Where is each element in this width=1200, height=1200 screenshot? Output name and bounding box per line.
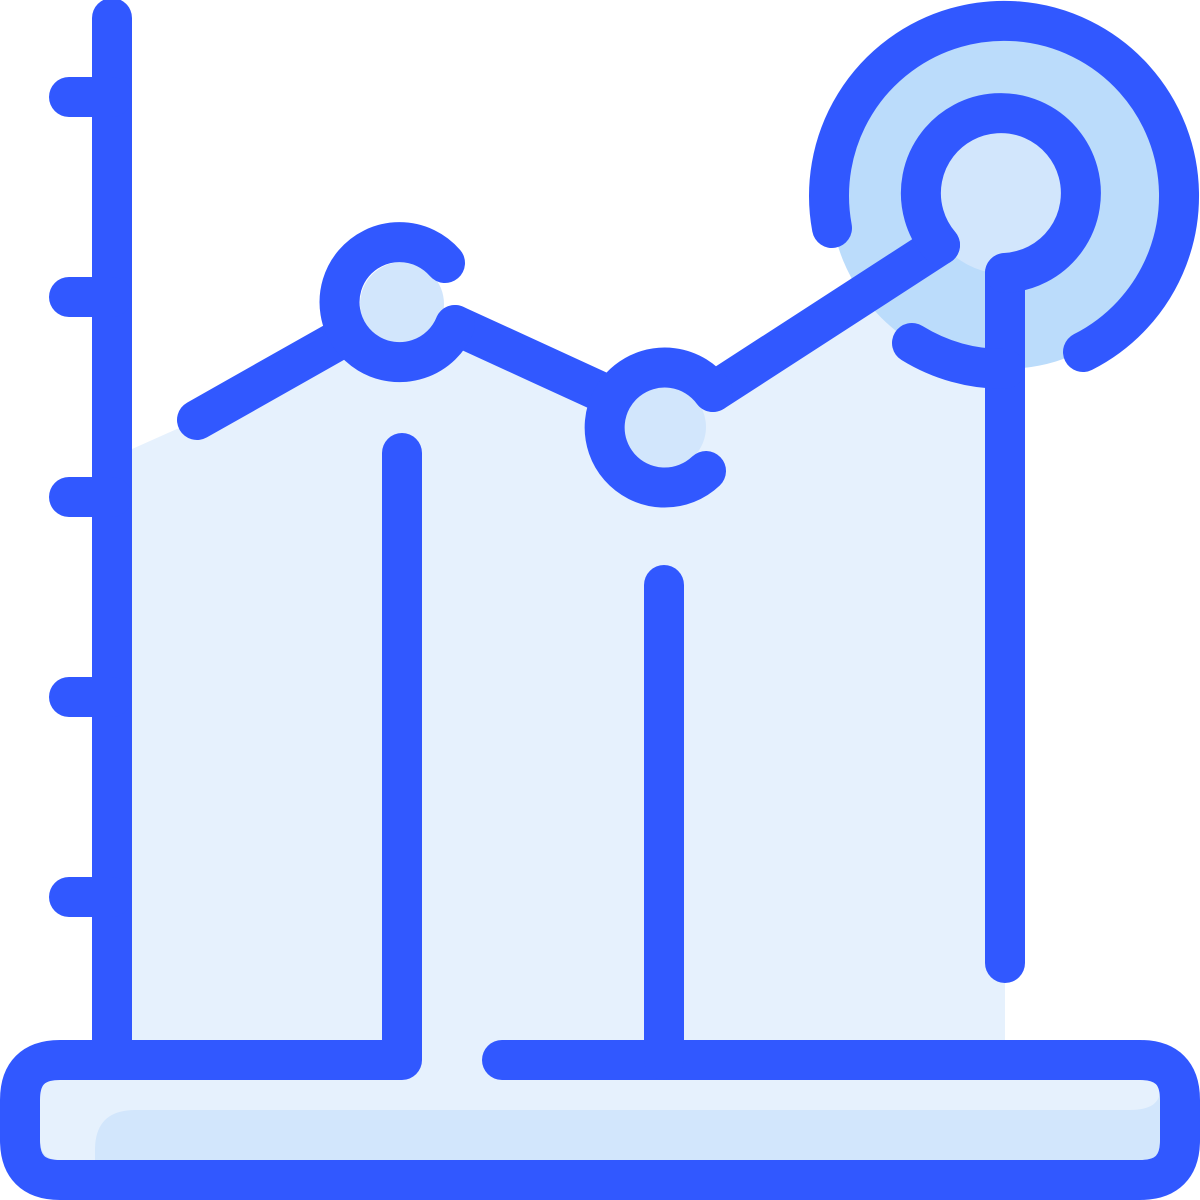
data point 1: [340, 242, 455, 362]
y axis with ticks: [69, 18, 112, 1060]
base bar outline: [20, 453, 1180, 1180]
trend line: [197, 245, 940, 420]
data point 3: [921, 113, 1081, 273]
point circle fills: [360, 262, 444, 346]
chart area fill: [112, 230, 1005, 1060]
base fill: [20, 1060, 1180, 1180]
data point 2: [605, 368, 713, 488]
big highlight circle fill: [830, 19, 1180, 369]
highlight ring: [829, 21, 1179, 352]
bar line middle: [644, 585, 684, 1060]
bar line right: [985, 273, 1025, 963]
